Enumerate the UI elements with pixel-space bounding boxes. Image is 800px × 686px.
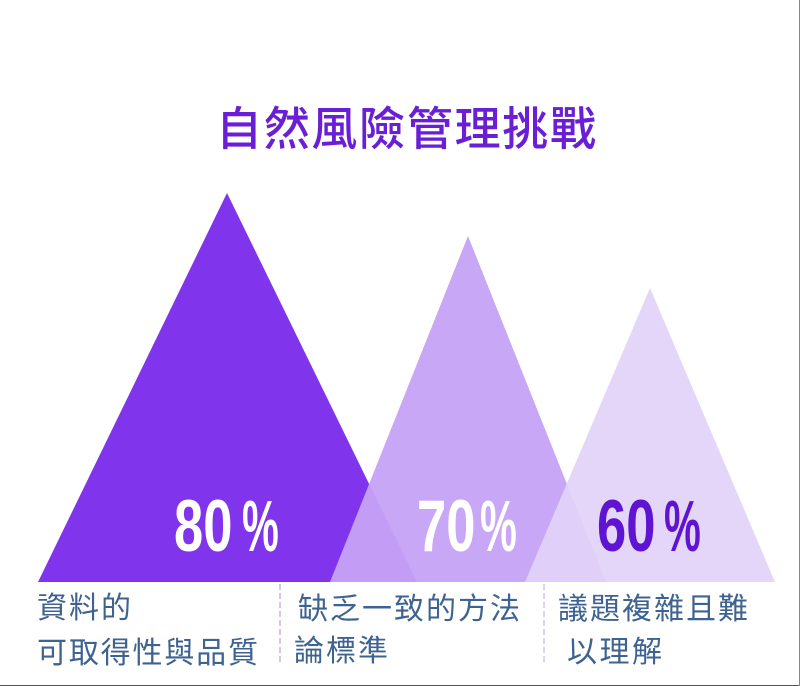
value: 70%: 70 <box>417 486 475 567</box>
label: complex and hard to understand <box>558 593 748 669</box>
label: data availability and quality <box>37 592 258 670</box>
value: 60%: 60 <box>597 486 655 567</box>
value: 60%: % <box>664 486 701 567</box>
triangle: 70% <box>330 236 606 582</box>
label: lack of consistent methodology standards: 缺乏一致的方法 <box>298 593 520 626</box>
title: 自然風險管理挑戰 <box>216 103 596 155</box>
value: 80%: 80 <box>174 486 232 567</box>
value: 60% <box>597 486 701 567</box>
value: 80%: % <box>242 486 279 567</box>
label: data availability and quality: 可取得性與品質 <box>37 637 258 670</box>
label: complex and hard to understand: 議題複雜且難 <box>558 593 748 626</box>
triangle chart <box>38 193 775 582</box>
label: data availability and quality: 資料的 <box>37 592 131 625</box>
value: 80% <box>174 486 279 567</box>
value: 70%: % <box>480 486 517 567</box>
label: complex and hard to understand: 以理解 <box>567 636 662 669</box>
label: lack of consistent methodology standards: 論標準 <box>294 635 388 668</box>
triangle: 60% <box>525 288 775 582</box>
triangle: 80% <box>38 193 417 582</box>
value: 70% <box>417 486 517 567</box>
label: lack of consistent methodology standards <box>294 593 520 668</box>
